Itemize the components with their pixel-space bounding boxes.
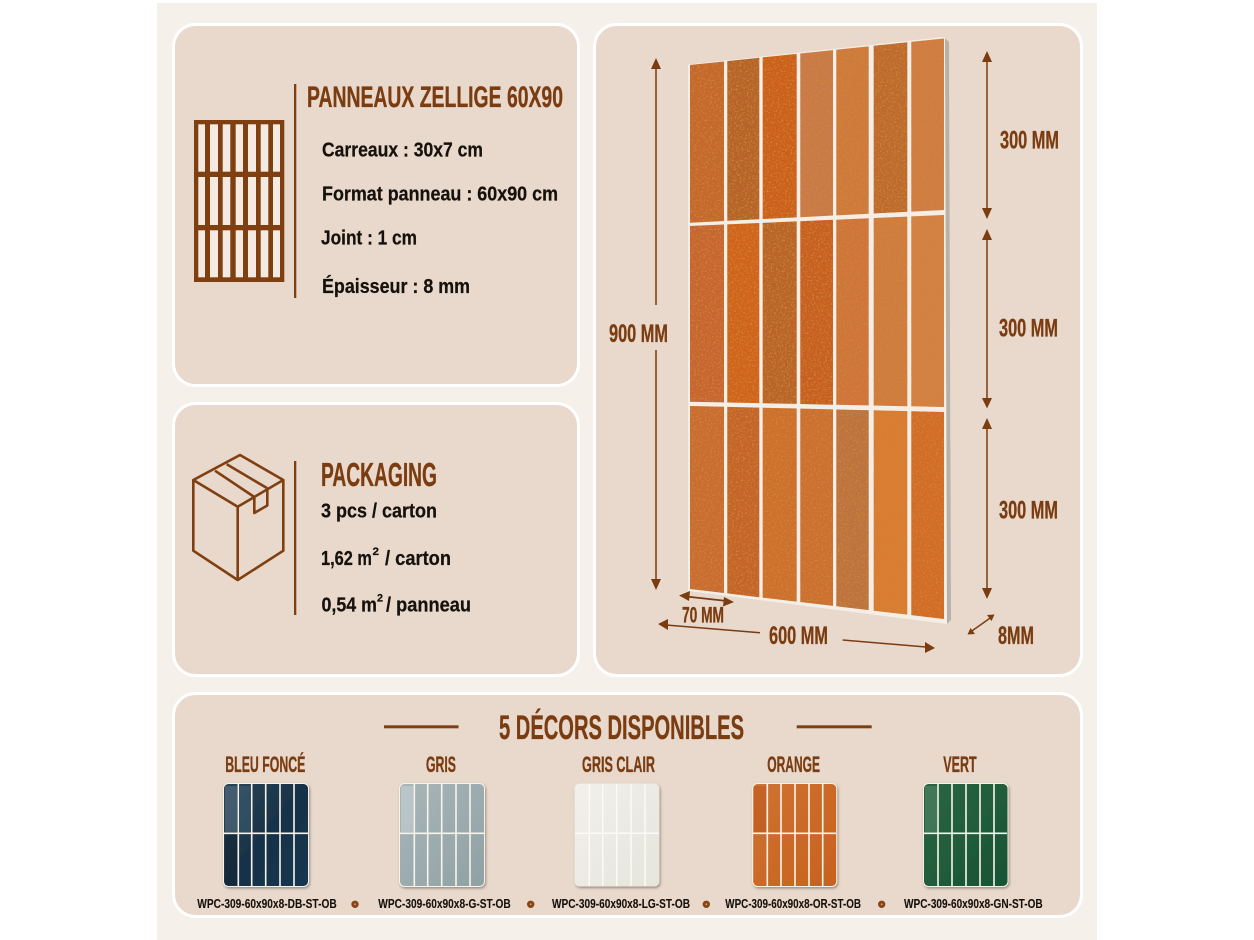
spec: area per carton [321, 546, 451, 570]
spec: area per carton: 1,62 m [321, 547, 372, 570]
decor: bleu foncé: WPC-309-60x90x8-DB-ST-OB [197, 896, 337, 911]
spec: pieces per carton: 3 pcs / carton [321, 499, 437, 522]
heading: panneaux zellige: PANNEAUX ZELLIGE 60X90 [307, 81, 563, 114]
spec: tile size: Carreaux : 30x7 cm [322, 139, 483, 162]
decor: vert: VERT [943, 752, 977, 777]
arrow: 8 mm thickness [968, 614, 994, 634]
label: middle 300 mm: 300 MM [999, 314, 1058, 342]
arrow: 70 mm tile width [679, 591, 734, 606]
decor: gris clair: GRIS CLAIR [582, 752, 655, 777]
icon: panel grid [194, 120, 284, 282]
decor: bleu foncé: BLEU FONCÉ [225, 752, 305, 777]
arrow: bottom row 300 mm [982, 418, 992, 599]
decor: vert [904, 752, 1043, 911]
label: 600 mm: 600 MM [769, 622, 828, 650]
swatch: gris clair [574, 784, 660, 886]
decor: gris: GRIS [426, 752, 456, 777]
spec: area per carton: / carton [385, 547, 451, 570]
panel: panneaux zellige specifications [174, 24, 578, 386]
label: 900 mm: 900 MM [609, 320, 668, 348]
arrow: 600 mm panel width [658, 619, 935, 653]
panel: available decors [174, 694, 1082, 916]
swatch: gris [400, 784, 484, 886]
spec: area per panel: / panneau [386, 594, 471, 617]
spec: area per carton: 2 [372, 546, 379, 558]
separator dots between product codes [353, 902, 884, 907]
decor: bleu foncé [197, 752, 337, 911]
decor: gris [378, 752, 511, 911]
arrow: top row 300 mm [982, 51, 992, 219]
panel photo: orange zellige tiles in perspective [688, 37, 951, 624]
spec: panel format: Format panneau : 60x90 cm [322, 183, 558, 206]
decor: gris clair: WPC-309-60x90x8-LG-ST-OB [552, 896, 690, 911]
decor: gris: WPC-309-60x90x8-G-ST-OB [378, 896, 511, 911]
icon: cardboard box [193, 455, 283, 580]
arrow: middle row 300 mm [982, 229, 992, 408]
decor: orange: ORANGE [767, 752, 820, 777]
panel: dimensions diagram [594, 24, 1082, 676]
decor: gris clair [552, 752, 690, 911]
decor: orange: WPC-309-60x90x8-OR-ST-OB [725, 896, 861, 911]
arrow: 900 mm height [651, 58, 661, 590]
label: 70 mm: 70 MM [682, 603, 724, 628]
spec: area per panel: 0,54 m [322, 594, 377, 617]
label: bottom 300 mm: 300 MM [999, 496, 1058, 524]
heading: packaging: PACKAGING [321, 456, 437, 493]
spec: joint: Joint : 1 cm [321, 227, 417, 250]
spec: area per panel [322, 593, 471, 617]
decor: vert: WPC-309-60x90x8-GN-ST-OB [904, 896, 1043, 911]
spec: thickness: Épaisseur : 8 mm [322, 275, 470, 298]
swatch: vert [924, 784, 1008, 886]
label: 8 mm: 8MM [998, 622, 1034, 650]
label: top 300 mm: 300 MM [1000, 126, 1059, 154]
decor: orange [725, 752, 861, 911]
swatch: orange [753, 784, 837, 886]
swatch: bleu foncé [224, 784, 308, 886]
spec: area per panel: 2 [377, 593, 383, 605]
heading: 5 decors: 5 DÉCORS DISPONIBLES [499, 709, 744, 747]
panel: packaging [174, 404, 578, 676]
